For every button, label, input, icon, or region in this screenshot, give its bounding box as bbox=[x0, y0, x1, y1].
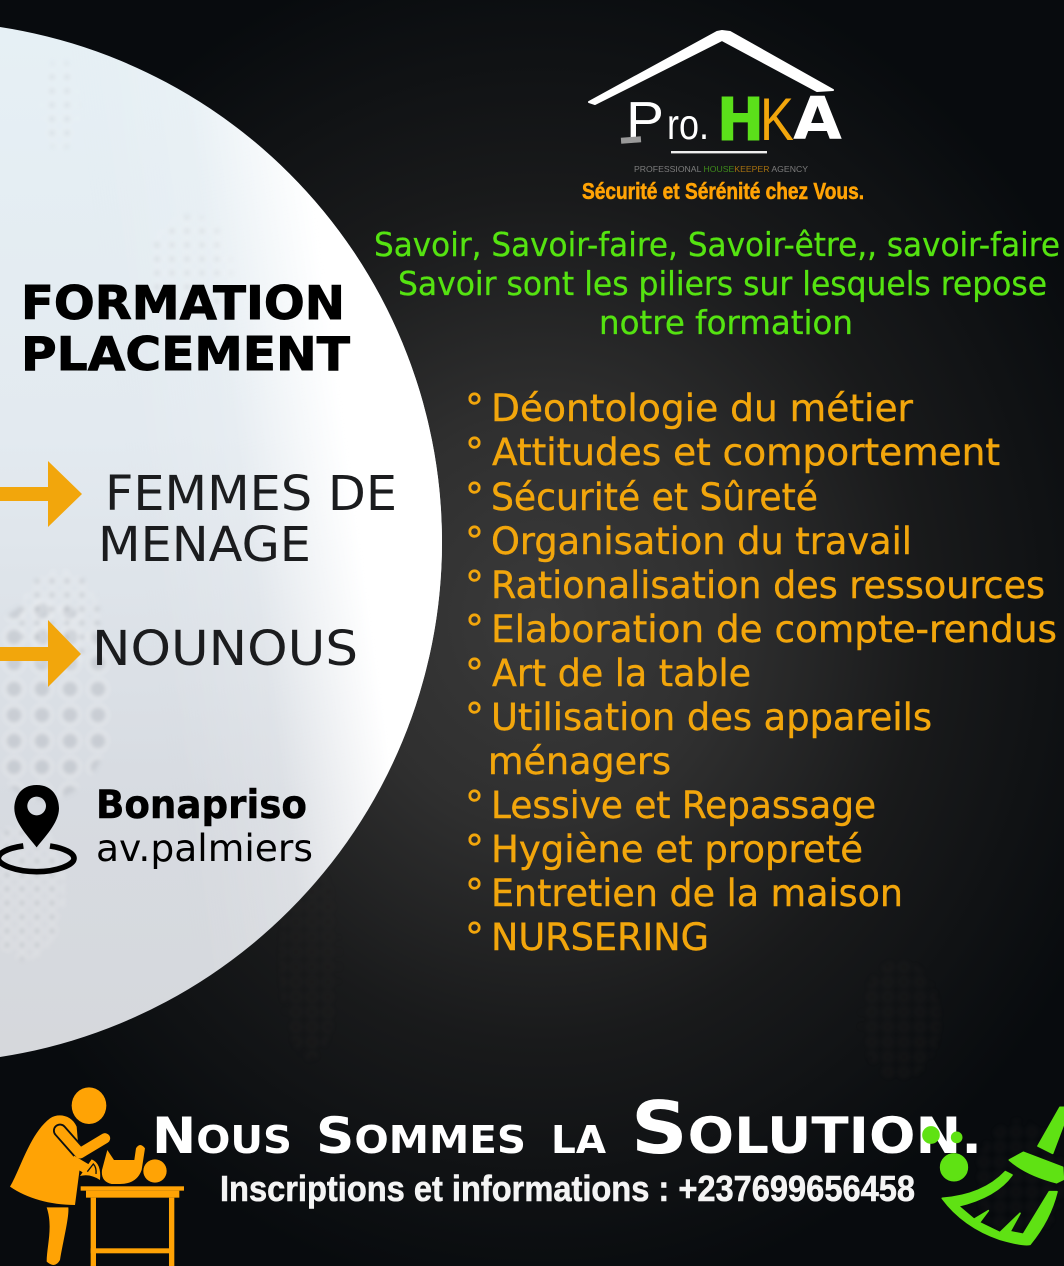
training topics list: Rationalisation des ressources bbox=[491, 564, 1045, 607]
slogan: SOMMES bbox=[316, 1107, 526, 1165]
label: femmes de menage: FEMMES DE bbox=[105, 466, 397, 522]
training topics list: ° bbox=[465, 695, 484, 739]
arrow: femmes de menage bbox=[0, 461, 82, 527]
address: av.palmiers bbox=[96, 827, 313, 870]
address bbox=[96, 783, 313, 870]
slogan: LA bbox=[551, 1118, 607, 1162]
slogan: NOUS bbox=[152, 1107, 292, 1165]
training topics list: ° bbox=[465, 386, 484, 430]
training topics list: Organisation du travail bbox=[491, 520, 912, 563]
intro text: Savoir sont les piliers sur lesquels repose bbox=[398, 264, 1047, 303]
training topics list: Entretien de la maison bbox=[491, 872, 903, 915]
label: nounous: NOUNOUS bbox=[92, 621, 358, 677]
training topics list: Hygiène et propreté bbox=[491, 828, 863, 871]
logo bbox=[589, 31, 842, 174]
training topics list: ° bbox=[465, 783, 484, 827]
contact line: Inscriptions et informations : +237699656458 bbox=[220, 1168, 915, 1209]
heading: formation placement bbox=[21, 276, 351, 381]
logo strapline: PROFESSIONAL HOUSEKEEPER AGENCY bbox=[634, 164, 808, 174]
training topics list: ménagers bbox=[488, 740, 671, 783]
icon: nanny changing baby bbox=[10, 1087, 184, 1266]
address: Bonapriso bbox=[96, 783, 307, 828]
training topics list: ° bbox=[465, 871, 484, 915]
logo wordmark: H bbox=[717, 85, 764, 154]
training topics list: Utilisation des appareils bbox=[491, 696, 932, 739]
icon: location pin bbox=[0, 785, 74, 872]
tagline: Sécurité et Sérénité chez Vous. bbox=[582, 178, 864, 204]
training topics list: ° bbox=[465, 827, 484, 871]
slogan bbox=[152, 1086, 982, 1170]
label: femmes de menage: MENAGE bbox=[98, 517, 311, 573]
training topics list: Attitudes et comportement bbox=[492, 431, 1000, 474]
training topics list: Déontologie du métier bbox=[491, 387, 914, 430]
intro text bbox=[374, 225, 1060, 342]
label: femmes de menage bbox=[98, 466, 397, 573]
logo wordmark: ro. bbox=[667, 101, 709, 149]
heading: formation placement: FORMATION bbox=[21, 276, 345, 330]
logo roof bbox=[589, 31, 833, 104]
training topics list: ° bbox=[465, 915, 484, 959]
training topics list: Sécurité et Sûreté bbox=[491, 476, 818, 519]
training topics list: NURSERING bbox=[491, 916, 709, 959]
training topics list: ° bbox=[465, 607, 484, 651]
white disc panel bbox=[0, 0, 450, 1070]
logo wordmark: A bbox=[793, 84, 842, 153]
training topics list: ° bbox=[465, 475, 484, 519]
logo wordmark bbox=[626, 84, 842, 154]
logo wordmark: P bbox=[626, 92, 664, 150]
training topics list bbox=[465, 386, 1057, 959]
logo wordmark: K bbox=[760, 86, 794, 153]
arrow: nounous bbox=[0, 620, 81, 687]
training topics list: Lessive et Repassage bbox=[491, 784, 876, 827]
slogan: SOLUTION. bbox=[631, 1086, 982, 1170]
training topics list: Elaboration de compte-rendus bbox=[491, 608, 1057, 651]
icon: green broom bbox=[923, 1107, 1064, 1245]
training topics list: ° bbox=[465, 563, 484, 607]
soap bubbles bbox=[7, 244, 172, 800]
training topics list: ° bbox=[465, 430, 484, 474]
training topics list: ° bbox=[465, 519, 484, 563]
intro text: notre formation bbox=[599, 303, 853, 342]
training topics list: ° bbox=[465, 651, 484, 695]
training topics list: Art de la table bbox=[492, 652, 751, 695]
dark bubble texture bbox=[280, 860, 1064, 1240]
heading: formation placement: PLACEMENT bbox=[21, 327, 351, 381]
